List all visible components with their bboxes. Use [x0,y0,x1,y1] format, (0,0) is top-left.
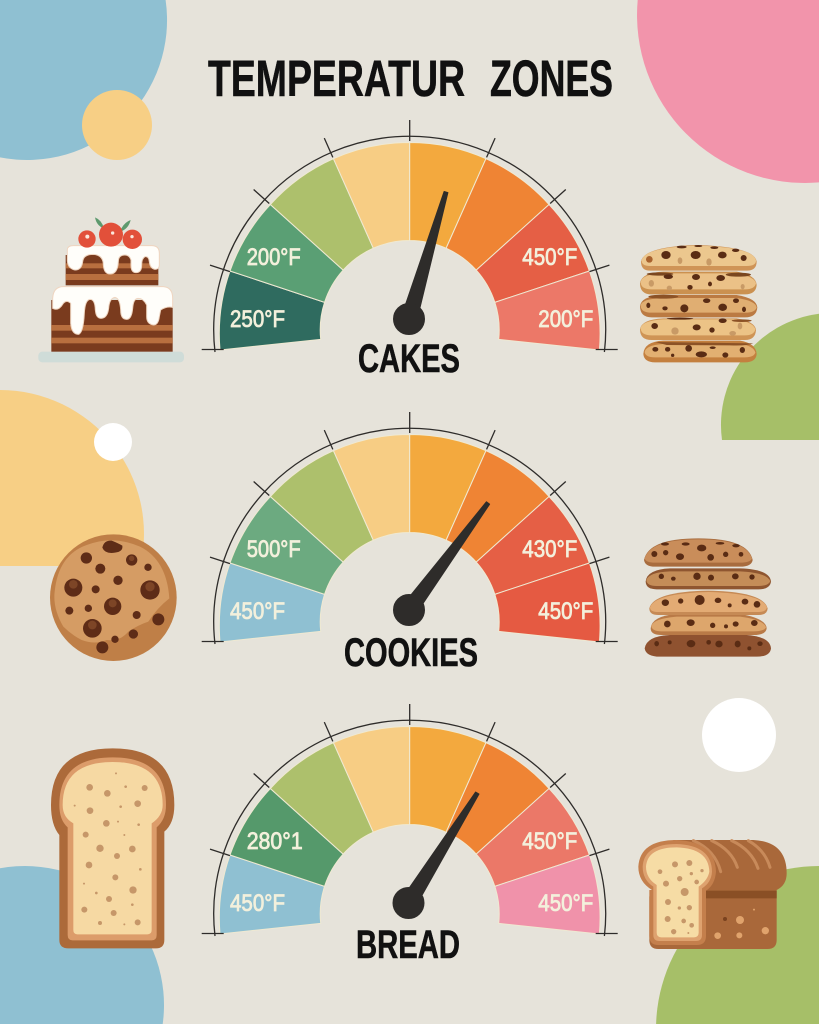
temperature labels: bread: 450°F [522,828,577,855]
icon: dark cookie stack [644,538,771,657]
bottom icing [53,287,173,334]
icon: chocolate chip cookie [50,534,177,661]
bottom tier [51,300,173,352]
dial segments: cookies [202,412,618,644]
icon: layered cake [38,217,184,362]
temperature labels: bread [230,828,593,917]
background blob: green bottom-right [656,866,819,1024]
gauge label: cakes: CAKES [358,337,460,381]
chocolate chips [64,541,164,653]
background blob: yellow left [0,390,144,566]
loaf side pores [714,909,769,939]
loaf band [706,891,777,898]
slice pores [658,860,704,934]
title: ZONES [490,50,613,107]
background dot: yellow [82,90,152,160]
bread pores [74,772,148,925]
cake plate [38,352,184,362]
background blob: blue bottom-left [0,866,164,1024]
gauge: cookies [202,412,618,675]
temperature labels: cookies: 450°F [538,598,593,625]
dark cookie 1 [644,538,753,567]
slice front [638,840,716,945]
cookie 4 [640,318,756,340]
background dot: white right [702,698,776,772]
gauge label: cookies: COOKIES [344,631,478,675]
cherries and leaves [78,217,142,249]
background dot: white left [94,423,132,461]
needle: bread [393,792,479,918]
cookie 2 [640,272,757,294]
temperature labels: bread: 450°F [538,890,593,917]
temperature labels: cookies: 450°F [230,598,285,625]
chip highlights [69,556,155,629]
temperature labels: cakes: 450°F [522,244,577,271]
temperature labels: bread: 280°1 [247,828,303,855]
dark cookie 3 [649,591,768,615]
temperature labels: cookies: 430°F [522,536,577,563]
temperature labels: bread: 450°F [230,890,285,917]
dark cookie 2 [646,568,771,589]
temperature labels: cakes [230,244,593,333]
cookie 3 [640,295,757,317]
gauge label: bread: BREAD [356,923,460,967]
cookie lighter surface [54,540,169,642]
temperature labels: cakes: 200°F [247,244,301,271]
background blob: pink top-right [637,0,819,183]
dial segments: cakes [202,120,618,352]
loaf crust stripes [693,841,770,872]
dial segments: bread [202,704,618,936]
icon: bread slice [51,748,174,948]
temperature labels: cookies: 500°F [247,536,301,563]
dark cookie 4 [651,614,767,635]
needle: cookies [394,502,490,626]
temperature labels: cookies [230,536,593,625]
top icing [67,246,159,274]
temperature labels: cakes: 200°F [538,306,593,333]
cookie 5 [643,341,757,362]
dark cookie 5 [645,635,771,657]
gauge: cakes [202,120,618,381]
background blob: blue top-left [0,0,167,160]
temperature labels: cakes: 250°F [230,306,285,333]
top tier [66,255,158,285]
icon: light cookie stack [640,245,757,362]
icon: bread loaf [638,840,787,949]
needle: cakes [394,192,448,334]
title: TEMPERATUR [208,50,465,107]
background blob: green right [721,314,819,440]
gauge: bread [202,704,618,967]
cookie 1 [641,245,757,271]
